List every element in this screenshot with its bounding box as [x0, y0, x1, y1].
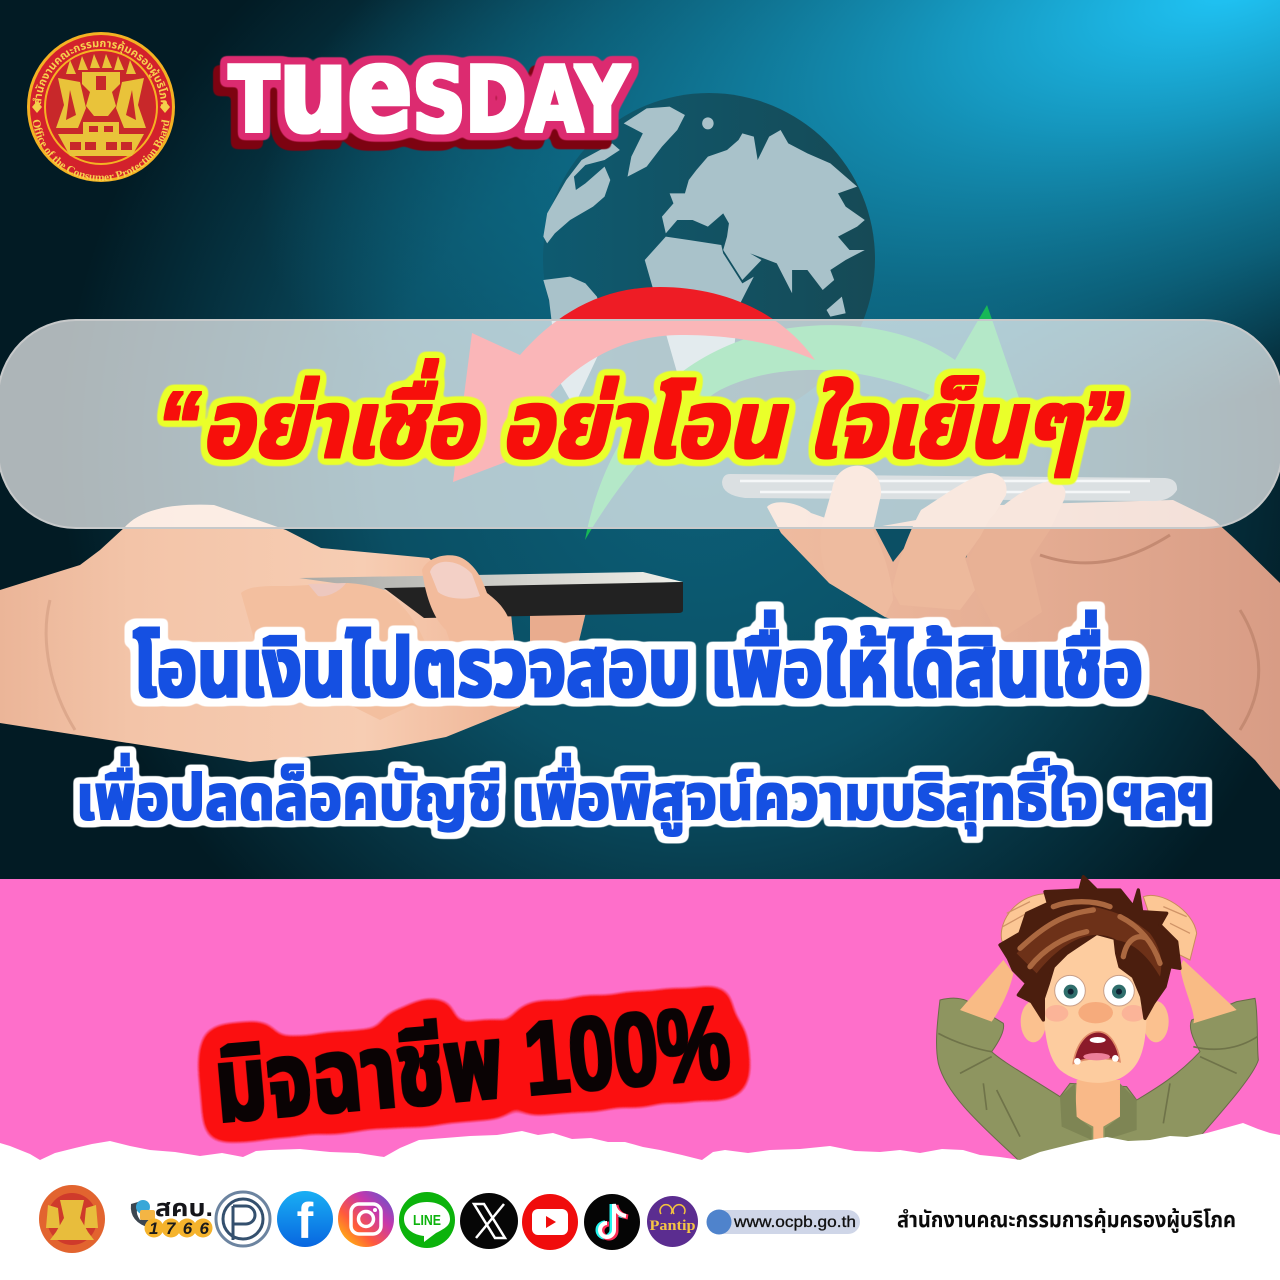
- icon: Facebook: [277, 1191, 333, 1249]
- curled finger: [241, 583, 446, 720]
- title: Tuesday: TueSDAY: [229, 21, 630, 159]
- icon: Pantip: [647, 1196, 698, 1247]
- finger 3: [892, 473, 1007, 610]
- website pill: www.ocpb.go.th: [733, 1214, 856, 1231]
- seal emblem: [56, 54, 146, 156]
- right hand holding phone: [722, 466, 1280, 790]
- shirt: [937, 998, 1258, 1162]
- icon: CPE: [216, 1192, 270, 1246]
- arms: [960, 960, 1013, 1022]
- second finger behind phone: [530, 612, 586, 672]
- eyes: [1055, 975, 1134, 1006]
- nose: [1078, 1002, 1113, 1023]
- seal: top logo: [27, 32, 175, 182]
- heading: do not believe: “อย่าเชื่อ อย่าโอน ใจเย็นๆ”: [157, 359, 1123, 477]
- icon: YouTube: [522, 1194, 578, 1250]
- seal text Thai: สำนักงานคณะกรรมการคุ้มครองผู้บริโภค: [32, 40, 168, 106]
- hotline number: 1766: [149, 1219, 210, 1238]
- seal text English: Office of the Consumer Protection Board: [33, 120, 170, 182]
- face: [1043, 933, 1147, 1083]
- thumb: [422, 555, 520, 707]
- left hand holding phone: [0, 505, 683, 762]
- neck: [1075, 1080, 1120, 1141]
- icon: globe: [543, 93, 875, 425]
- finger gaps: [874, 526, 978, 562]
- seal: footer logo: [39, 1185, 105, 1253]
- panel: translucent banner: [0, 320, 1280, 528]
- arrow: red: [453, 287, 815, 482]
- hand back: [0, 505, 520, 762]
- mouth: [1073, 1032, 1120, 1065]
- icon: Facebook: f: [297, 1193, 314, 1249]
- palm and pinky: [767, 500, 1280, 790]
- arrow: green: [585, 305, 1030, 540]
- character: panicked man: [937, 877, 1258, 1162]
- phone: black: [299, 572, 683, 618]
- badge: scam 100 percent: มิจฉาชีพ 100%: [210, 984, 734, 1145]
- icon: hotline 1766: [131, 1195, 213, 1238]
- icon: Pantip: Pantip: [650, 1218, 696, 1234]
- ears: [1021, 1001, 1046, 1042]
- hotline label: สคบ.: [155, 1195, 213, 1222]
- hands: [1001, 893, 1053, 957]
- icon: LINE: [399, 1192, 455, 1248]
- footer organisation name: สำนักงานคณะกรรมการคุ้มครองผู้บริโภค: [897, 1207, 1236, 1233]
- icon: TikTok: [584, 1194, 640, 1250]
- icon: Instagram: [338, 1191, 394, 1247]
- background: [0, 0, 1280, 880]
- icon: X: [460, 1193, 518, 1249]
- finger 4: [968, 481, 1065, 640]
- hair: [1000, 877, 1180, 1020]
- phone: silver: [722, 474, 1177, 501]
- pink band: [0, 879, 1280, 1179]
- finger 2: [820, 466, 893, 617]
- icon: LINE: LINE: [413, 1212, 441, 1229]
- torn white footer: [0, 1123, 1280, 1280]
- website pill: [706, 1210, 860, 1234]
